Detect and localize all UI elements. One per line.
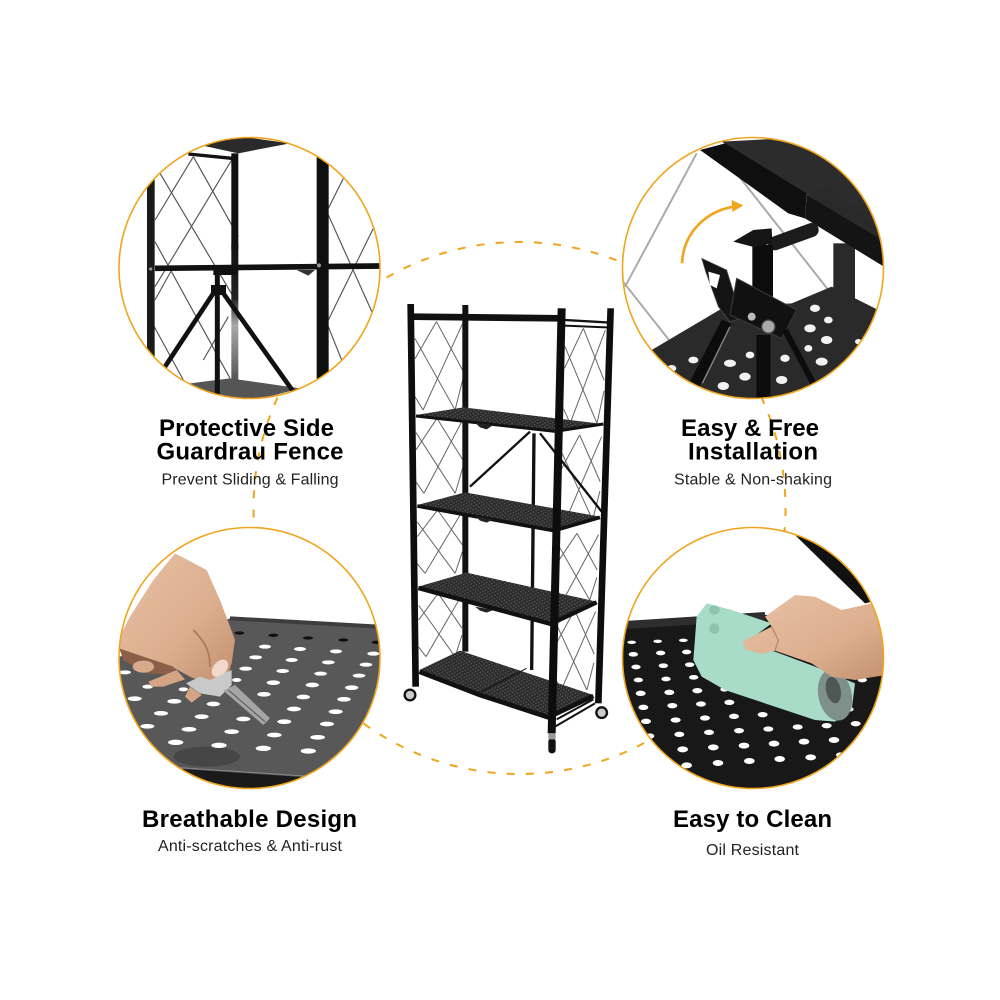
feature text: breathable: Breathable Design — [142, 806, 357, 833]
black holes — [234, 631, 382, 644]
perforations — [667, 305, 862, 390]
ring — [622, 528, 884, 788]
ring — [622, 138, 884, 398]
hinge arm — [775, 230, 812, 243]
right side lattice — [555, 328, 605, 690]
hand — [113, 553, 235, 683]
tray — [623, 614, 882, 788]
bottom brace — [555, 699, 595, 727]
key — [186, 670, 232, 697]
tray surface — [120, 618, 380, 777]
ring — [119, 138, 380, 398]
hand — [742, 595, 892, 680]
circle: protective side fence — [119, 135, 380, 400]
feature text: installation: Easy & Free — [681, 415, 819, 442]
feature text: protective side: Prevent Sliding & Falling — [162, 472, 338, 488]
lower shelf — [652, 286, 876, 398]
top rails — [413, 317, 612, 328]
feature text: easy to clean: Easy to Clean — [673, 806, 832, 833]
shelf tier 3 — [418, 573, 597, 625]
diagonal post — [796, 536, 870, 604]
cross rail — [155, 266, 380, 268]
rotation arrow — [682, 200, 743, 263]
feature text: breathable: Anti-scratches & Anti-rust — [158, 838, 343, 855]
gray lattice — [622, 153, 828, 343]
folding tripod — [165, 272, 293, 395]
ring — [119, 528, 380, 788]
bolts — [762, 320, 775, 333]
front posts — [411, 304, 611, 733]
white holes — [119, 645, 379, 754]
cross tube — [730, 278, 797, 338]
feature text: protective side: Guardrau Fence — [156, 438, 344, 466]
feature text: protective side: Protective Side — [159, 415, 334, 442]
fingers — [119, 648, 178, 675]
posts — [147, 173, 155, 360]
overhead beam — [722, 139, 875, 224]
shelf tier 4 — [419, 651, 593, 718]
shelf overhead — [205, 138, 288, 154]
lattice — [153, 157, 373, 380]
feature text: protective side — [156, 415, 344, 488]
feature text: easy to clean: Oil Resistant — [706, 842, 800, 859]
circle: installation hinge — [622, 137, 895, 407]
left side lattice — [415, 322, 463, 657]
towel — [693, 603, 855, 722]
tripod legs — [693, 322, 813, 400]
feature text: installation — [674, 415, 832, 488]
rear posts — [465, 305, 602, 670]
dashed connecting ring — [254, 242, 786, 774]
shelf tier 2 — [417, 492, 600, 532]
casters — [405, 690, 607, 753]
circle: breathable tray with key — [110, 528, 387, 797]
latch plate — [702, 258, 742, 322]
circle: cleaning with towel — [615, 528, 892, 797]
rack product photo — [405, 304, 612, 753]
shelf tier 1 — [416, 407, 603, 433]
feature text: installation: Installation — [688, 438, 818, 466]
feature text: easy to clean — [673, 806, 832, 859]
lower shelf — [190, 378, 300, 400]
feature text: breathable — [142, 806, 357, 855]
feature text: installation: Stable & Non-shaking — [674, 472, 832, 488]
holes — [627, 639, 867, 768]
